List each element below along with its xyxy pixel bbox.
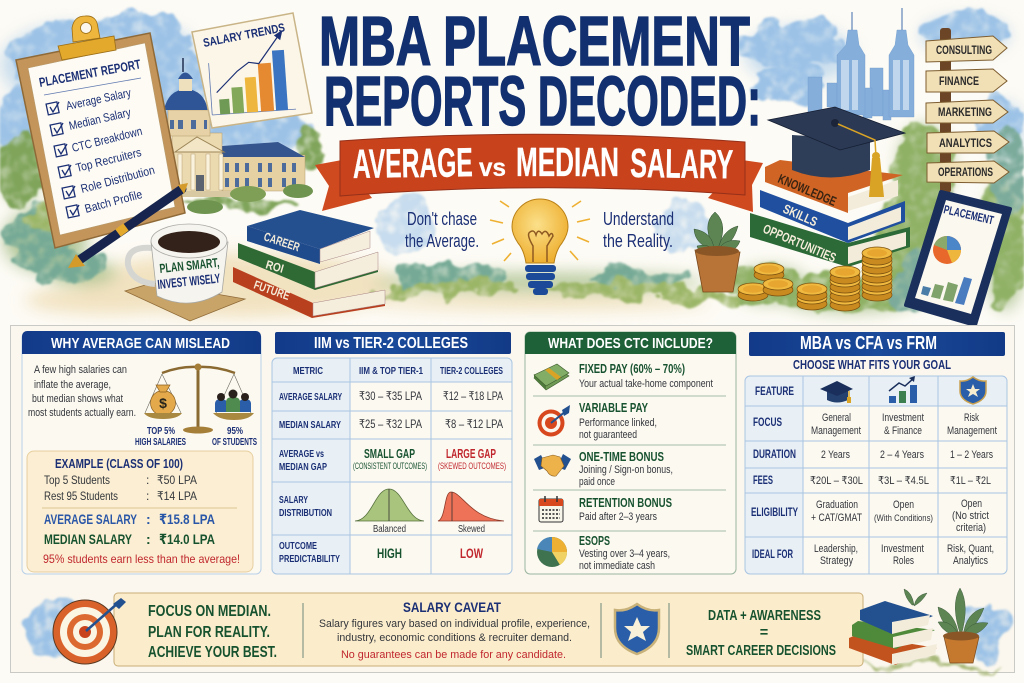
item: esops: ESOPS [579, 534, 610, 548]
tagline right: Understand [603, 209, 674, 229]
row labels: MEDIAN SALARY [279, 419, 341, 431]
illustration: phone with placement dashboard: PLACEMENT [942, 202, 996, 227]
footer motto: PLAN FOR REALITY. [148, 624, 270, 641]
intro text: most students actually earn. [28, 407, 136, 419]
table values: Open [961, 498, 982, 510]
example box: AVERAGE SALARY [44, 511, 137, 527]
row labels: MEDIAN GAP [279, 461, 327, 473]
panel heading: WHAT DOES CTC INCLUDE? [548, 335, 713, 352]
ribbon text: vs [479, 154, 506, 182]
row labels: PREDICTABILITY [279, 553, 340, 565]
example box: : [146, 489, 149, 503]
ribbon text [352, 139, 734, 187]
gap values: (SKEWED OUTCOMES) [438, 461, 506, 471]
table values: Risk [964, 412, 979, 424]
tagline left: the Average. [405, 231, 479, 251]
item: esops [579, 534, 670, 572]
row labels: ELIGIBILITY [751, 505, 798, 519]
example box: ₹14 LPA [157, 489, 197, 503]
illustration: city skyline [808, 8, 914, 120]
table values: ₹3L – ₹4.5L [878, 475, 929, 487]
example box: EXAMPLE (CLASS OF 100) [55, 456, 183, 471]
item: retention bonus: RETENTION BONUS [579, 496, 672, 510]
item: fixed pay [579, 362, 713, 390]
item: one-time bonus: paid once [579, 476, 615, 488]
checklist: Batch Profile [83, 187, 144, 216]
ribbon text: AVERAGE [352, 139, 473, 187]
book labels: CAREER [262, 230, 302, 254]
panel: what does ctc include [525, 332, 736, 574]
scale captions: OF STUDENTS [212, 437, 257, 448]
item: variable pay [579, 401, 657, 441]
table values: 2 Years [821, 449, 850, 461]
row labels: FEATURE [755, 384, 794, 398]
row labels: DISTRIBUTION [279, 507, 332, 519]
data plus awareness: DATA + AWARENESS [708, 608, 821, 624]
scale captions: TOP 5% [147, 426, 175, 437]
table values: Leadership, [814, 543, 858, 555]
chart: skewed distribution: Skewed [458, 524, 485, 535]
panel: why average can mislead [22, 331, 261, 574]
data plus awareness: = [760, 625, 768, 641]
icon: frm shield [960, 377, 986, 404]
clip [58, 16, 116, 60]
intro text: but median shows what [32, 393, 123, 405]
table values [810, 412, 997, 567]
predictability values: HIGH [377, 545, 402, 561]
table values: Graduation [816, 499, 858, 511]
book labels [761, 171, 839, 265]
salary values: ₹30 – ₹35 LPA [359, 389, 422, 403]
book labels: ROI [264, 257, 285, 276]
sign labels: CONSULTING [936, 43, 992, 57]
tagline left: Don't chase [407, 209, 477, 229]
salary values: ₹12 – ₹18 LPA [443, 389, 503, 403]
example box: Top 5 Students [44, 473, 110, 487]
table values: criteria) [956, 522, 986, 534]
gap values: (CONSISTENT OUTCOMES) [353, 461, 427, 471]
intro text: inflate the average, [34, 379, 111, 391]
icon: footer plant [904, 588, 988, 663]
report title: PLACEMENT REPORT [38, 56, 142, 90]
scale captions: 95% [227, 426, 243, 437]
example box: Rest 95 Students [44, 489, 118, 503]
illustration: phone with placement dashboard [906, 192, 1010, 325]
example box: ₹50 LPA [157, 473, 197, 487]
lower content frame [10, 326, 1014, 672]
row labels [751, 384, 798, 561]
comparison table [272, 358, 512, 574]
panel heading: WHY AVERAGE CAN MISLEAD [51, 335, 230, 352]
panel heading [275, 332, 511, 354]
table values: ₹1L – ₹2L [950, 475, 991, 487]
subheading: CHOOSE WHAT FITS YOUR GOAL [793, 357, 951, 372]
icon: pie chart [537, 537, 567, 567]
icon: graduation cap [768, 107, 905, 197]
example box: : [146, 473, 149, 487]
pie chart [933, 236, 961, 264]
icon: handshake [534, 454, 571, 476]
item: variable pay: Performance linked, [579, 417, 657, 429]
book labels: KNOWLEDGE [776, 171, 839, 209]
table values: Investment [882, 412, 924, 424]
item: one-time bonus [579, 450, 673, 488]
intro text [28, 364, 136, 419]
ribbon banner: average vs median salary [315, 134, 763, 212]
panel: mba vs cfa vs frm [745, 332, 1007, 574]
sign labels: ANALYTICS [939, 136, 992, 150]
item: fixed pay: FIXED PAY (60% – 70%) [579, 362, 685, 376]
book labels: SKILLS [781, 201, 820, 229]
book labels [252, 230, 302, 303]
gap values: LARGE GAP [446, 446, 496, 461]
predictability values [377, 545, 484, 561]
salary values [359, 389, 503, 431]
book labels: OPPORTUNITIES [761, 221, 839, 265]
table values: Open [893, 499, 914, 511]
checklist: Median Salary [68, 105, 132, 133]
sign labels: MARKETING [938, 105, 992, 119]
gap values [353, 446, 506, 471]
example box: MEDIAN SALARY [44, 531, 132, 547]
illustration: coffee mug on coaster: INVEST WISELY [157, 270, 221, 292]
panel: iim vs tier-2 colleges [272, 332, 512, 574]
icon: mba cap [820, 381, 853, 403]
title: MBA PLACEMENT [319, 2, 750, 80]
checklist: CTC Breakdown [70, 124, 144, 155]
table values: ₹20L – ₹30L [810, 475, 863, 487]
item: esops: Vesting over 3–4 years, [579, 548, 670, 560]
item: esops: not immediate cash [579, 560, 655, 572]
row labels: FOCUS [753, 415, 782, 429]
illustration: right book stack [750, 160, 910, 267]
mug slogan: PLAN SMART, [159, 255, 220, 276]
table values: Strategy [820, 555, 853, 567]
icon: calendar [539, 496, 563, 522]
icon: potted plant [694, 212, 740, 292]
table values: Investment [881, 543, 924, 555]
example box: ₹15.8 LPA [159, 511, 215, 527]
row labels [279, 365, 342, 565]
data plus awareness: SMART CAREER DECISIONS [686, 643, 836, 659]
salary caveat: industry, economic conditions & recruiter demand. [337, 632, 572, 644]
salary values: ₹25 – ₹32 LPA [359, 417, 422, 431]
sign labels: FINANCE [939, 74, 979, 88]
row labels: DURATION [753, 447, 796, 461]
table values: + CAT/GMAT [811, 512, 862, 524]
icon: target [538, 405, 570, 436]
row labels: IDEAL FOR [752, 547, 793, 561]
icon: shield [615, 604, 659, 654]
item: retention bonus: Paid after 2–3 years [579, 511, 657, 523]
table values: Analytics [953, 555, 988, 567]
table values: Management [811, 425, 861, 437]
chart: balanced distribution: Balanced [373, 524, 406, 535]
sign labels [936, 43, 993, 179]
bar chart [921, 277, 972, 305]
column headings [359, 365, 503, 377]
tagline right [603, 209, 674, 251]
illustration: placement report clipboard [16, 16, 188, 268]
example box: : [146, 531, 151, 547]
panel heading [22, 331, 261, 354]
column headings: IIM & TOP TIER-1 [359, 365, 423, 377]
checklist: Top Recruiters [74, 145, 143, 175]
panel heading [749, 332, 1005, 356]
panel heading: MBA vs CFA vs FRM [800, 333, 937, 353]
checklist: Average Salary [65, 86, 132, 113]
table values: (With Conditions) [874, 513, 933, 524]
icon: target with arrow [53, 598, 126, 664]
table values: 1 – 2 Years [950, 449, 993, 461]
comparison table [745, 376, 1007, 574]
salary caveat: Salary figures vary based on individual profile, experience, [319, 618, 590, 630]
students [215, 390, 251, 412]
icon: cash bundle [534, 364, 569, 390]
ribbon text: SALARY [630, 140, 734, 187]
item: fixed pay: Your actual take-home component [579, 378, 713, 390]
table values: Risk, Quant, [947, 543, 994, 555]
book labels: FUTURE [252, 278, 292, 303]
footer motto: FOCUS ON MEDIAN. [148, 603, 271, 620]
example box [27, 451, 253, 572]
table values: 2 – 4 Years [880, 449, 924, 461]
sign labels: OPERATIONS [938, 165, 993, 179]
bar chart: rising salaries [207, 29, 296, 115]
row labels: OUTCOME [279, 540, 317, 552]
pen [68, 183, 188, 268]
footer watercolor wash [24, 598, 1010, 668]
table values: (No strict [952, 510, 989, 522]
gap values: SMALL GAP [364, 446, 415, 461]
item: retention bonus [579, 496, 672, 523]
table values: Management [947, 425, 997, 437]
column headings: TIER-2 COLLEGES [440, 365, 503, 377]
icon: cfa chart [889, 376, 917, 403]
illustration: signpost career paths [926, 28, 1009, 193]
footer motto [148, 603, 277, 661]
illustration: college building [164, 58, 313, 214]
salary caveat: SALARY CAVEAT [403, 599, 501, 615]
panel heading [525, 332, 736, 354]
checklist [46, 86, 156, 218]
chart: balanced distribution [355, 489, 424, 535]
item: one-time bonus: ONE-TIME BONUS [579, 450, 664, 464]
item: variable pay: VARIABLE PAY [579, 401, 648, 415]
example box: ₹14.0 LPA [159, 531, 215, 547]
predictability values: LOW [460, 545, 484, 561]
item: one-time bonus: Joining / Sign-on bonus, [579, 464, 673, 476]
illustration: salary trends card [192, 13, 312, 128]
chart: skewed distribution [438, 492, 504, 535]
footer banner [114, 593, 863, 666]
item: variable pay: not guaranteed [579, 429, 637, 441]
soft colour base for scenery [0, 17, 1024, 317]
illustration: book stack career roi future [233, 210, 385, 318]
row labels: FEES [753, 473, 773, 487]
tagline right: the Reality. [603, 231, 673, 251]
illustration: footer books [849, 601, 937, 665]
illustration: coin stacks [738, 247, 892, 311]
row labels: SALARY [279, 494, 308, 506]
card heading: SALARY TRENDS [202, 20, 286, 50]
footer motto: ACHIEVE YOUR BEST. [148, 644, 277, 661]
example box: : [146, 511, 151, 527]
icon: balance scale [144, 364, 254, 434]
example box: 95% students earn less than the average! [43, 552, 240, 566]
table values: Roles [893, 555, 914, 567]
icon: light bulb [490, 199, 590, 295]
title [319, 2, 761, 140]
row labels: AVERAGE vs [279, 448, 324, 460]
watercolor scenery wash [0, 12, 1024, 314]
intro text: A few high salaries can [34, 364, 127, 376]
checklist: Role Distribution [79, 163, 156, 196]
salary caveat [319, 599, 590, 661]
ribbon text: MEDIAN [516, 139, 619, 185]
tagline left [405, 209, 479, 251]
money bag: $ [159, 395, 167, 411]
salary caveat: No guarantees can be made for any candidate. [341, 649, 566, 661]
scale captions: HIGH SALARIES [135, 437, 186, 448]
illustration: coffee mug on coaster [125, 224, 245, 321]
salary values: ₹8 – ₹12 LPA [445, 417, 503, 431]
scale captions [135, 426, 257, 448]
data plus awareness [686, 608, 836, 659]
table values: General [822, 412, 851, 424]
row labels: METRIC [293, 365, 323, 377]
table values: & Finance [884, 425, 922, 437]
row labels: AVERAGE SALARY [279, 391, 342, 403]
panel heading: IIM vs TIER-2 COLLEGES [314, 335, 468, 352]
